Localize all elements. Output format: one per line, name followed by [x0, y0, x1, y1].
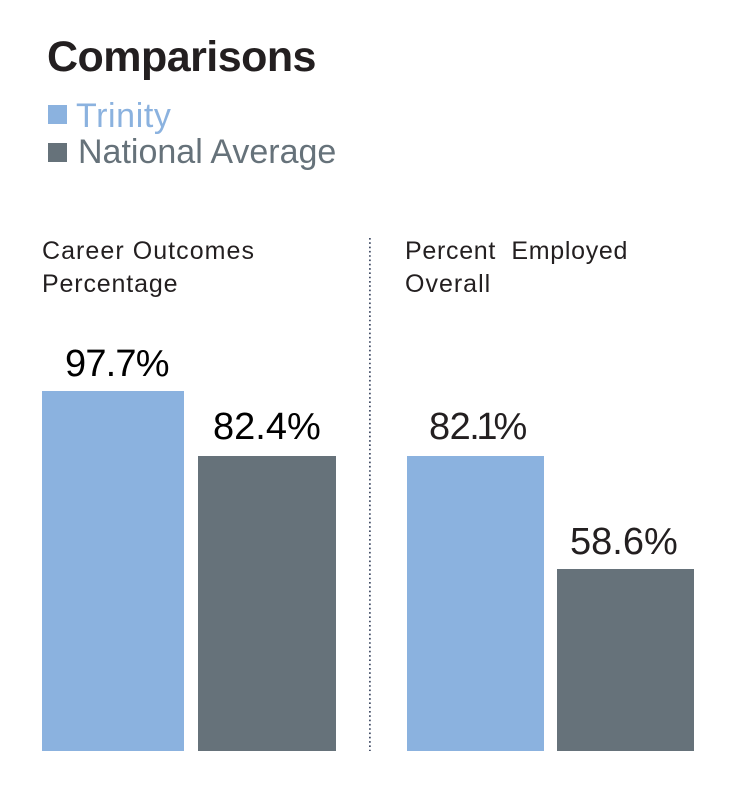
- bar: National Average: [198, 456, 336, 751]
- value: National Average 82.4%: 82.4%: [213, 406, 321, 448]
- heading: Overall: [405, 270, 491, 298]
- bar: National Average: [557, 569, 694, 751]
- value: Trinity 97.7%: 97.7%: [65, 343, 169, 385]
- value: Trinity 82.1%: 82.1%: [429, 406, 527, 448]
- panel: percent employed overall: [405, 237, 694, 751]
- bar: Trinity: [42, 391, 184, 751]
- value: National Average 58.6%: 58.6%: [570, 521, 678, 563]
- heading: Career Outcomes: [42, 237, 255, 265]
- heading: [42, 237, 255, 298]
- legend: National Average: National Average: [78, 133, 336, 171]
- heading: Percentage: [42, 270, 178, 298]
- heading: Percent Employed: [405, 237, 628, 265]
- bar: Trinity: [407, 456, 544, 751]
- title: Comparisons: [47, 33, 316, 81]
- panel: career outcomes percentage: [42, 237, 336, 751]
- heading: [405, 237, 628, 298]
- divider: [369, 238, 371, 751]
- legend: Trinity: Trinity: [76, 97, 172, 135]
- legend: [48, 97, 336, 171]
